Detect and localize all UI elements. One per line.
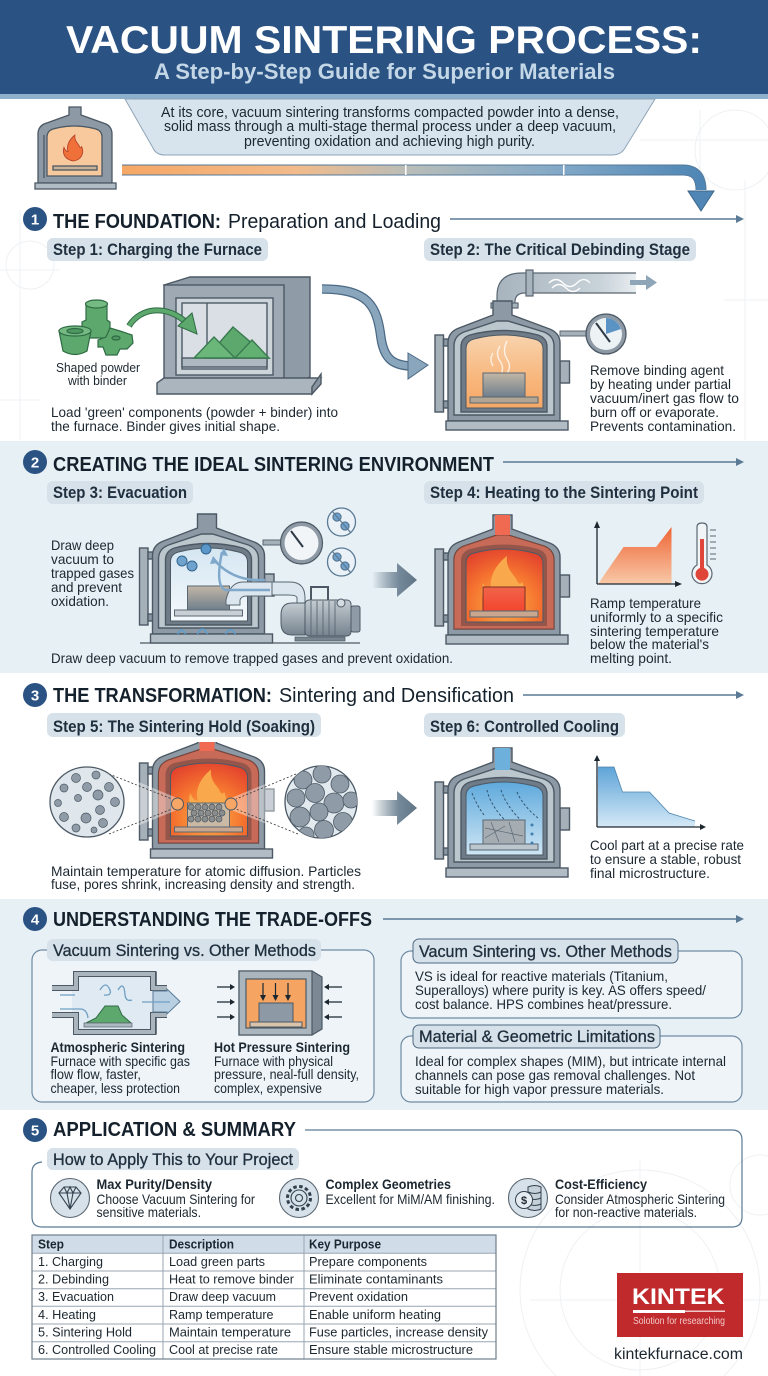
step 6 pill: Step 6: Controlled Cooling bbox=[430, 718, 619, 736]
text: step 3 side note: and prevent bbox=[51, 580, 122, 595]
website url: kintekfurnace.com bbox=[614, 1346, 743, 1363]
step 5 pill bbox=[47, 713, 321, 737]
step 3 pill: Step 3: Evacuation bbox=[53, 484, 187, 502]
arrow: green loading arrow bbox=[129, 310, 197, 334]
box furnace with green load bbox=[157, 277, 321, 394]
intro callout: At its core, vacuum sintering transforms compacted powder into a dense, bbox=[161, 105, 619, 121]
summary table: Fuse particles, increase density bbox=[309, 1324, 488, 1339]
text body bbox=[415, 1054, 726, 1097]
icon: loose particle magnification bbox=[50, 767, 124, 837]
chart: heating ramp bbox=[594, 521, 682, 587]
text: step 5 description: Maintain temperature for atomic diffusion. Particles bbox=[51, 864, 361, 879]
text: complex geometries: Complex Geometries bbox=[326, 1176, 451, 1192]
text: step 3 side note: trapped gases bbox=[51, 566, 134, 581]
panel: material and geometric limitations bbox=[401, 1025, 742, 1102]
text: atmospheric sintering: Atmospheric Sintering bbox=[50, 1039, 185, 1055]
text: step 2 description: by heating under partial bbox=[590, 377, 731, 392]
text: step 2 description: burn off or evaporate. bbox=[590, 405, 719, 420]
panel heading: Material & Geometric Limitations bbox=[419, 1028, 655, 1046]
text: complex geometries bbox=[326, 1176, 495, 1207]
summary table: Heat to remove binder bbox=[169, 1272, 295, 1287]
intro callout: solid mass through a multi-stage thermal process under a deep vacuum, bbox=[164, 119, 616, 135]
summary table: Prevent oxidation bbox=[309, 1289, 408, 1304]
text: complex geometries: Excellent for MiM/AM finishing. bbox=[326, 1192, 495, 1207]
icon: green powder parts bbox=[59, 300, 133, 355]
text body: Ideal for complex shapes (MIM), but intricate internal bbox=[415, 1054, 726, 1069]
section 1 heading bbox=[23, 207, 744, 233]
text: step 2 description bbox=[590, 363, 739, 434]
text: step 5 description: fuse, pores shrink, increasing density and strength. bbox=[51, 877, 355, 892]
icon: gear bbox=[280, 1178, 318, 1218]
section 1 heading: 1 bbox=[31, 212, 39, 228]
text: hot pressure sintering: Furnace with physical bbox=[214, 1054, 333, 1069]
section 4 heading: 4 bbox=[31, 912, 40, 928]
text: step 4 description: uniformly to a specific bbox=[590, 610, 723, 625]
text: hot pressure sintering: Hot Pressure Sintering bbox=[214, 1039, 350, 1055]
illustration: debinding furnace bbox=[435, 301, 570, 430]
icon: thermometer bbox=[692, 523, 716, 584]
icon: vacuum gauge bbox=[263, 522, 322, 564]
illustration: cooling furnace bbox=[435, 748, 570, 877]
text: step 6 description: Cool part at a precise rate bbox=[590, 838, 744, 853]
text: step 4 description: sintering temperature bbox=[590, 624, 719, 639]
caption: shaped powder bbox=[56, 361, 140, 388]
step 2 pill: Step 2: The Critical Debinding Stage bbox=[430, 241, 690, 259]
text: step 4 description bbox=[590, 596, 723, 666]
text: cost efficiency: Cost-Efficiency bbox=[555, 1176, 647, 1192]
icon: hot press furnace bbox=[217, 971, 342, 1035]
caption: shaped powder: with binder bbox=[67, 374, 127, 388]
text: atmospheric sintering: cheaper, less protection bbox=[50, 1081, 180, 1096]
panel heading: Vacum Sintering vs. Other Methods bbox=[419, 943, 672, 961]
text body: Superalloys) where purity is key. AS offers speed/ bbox=[415, 983, 706, 998]
section 1 heading: Preparation and Loading bbox=[228, 210, 441, 233]
text: step 4 description: below the material's bbox=[590, 637, 709, 652]
text: step 2 description: vacuum/inert gas flow to bbox=[590, 391, 739, 406]
icon: exhaust pipe bbox=[491, 270, 657, 308]
text: atmospheric sintering bbox=[50, 1039, 190, 1096]
text: step 3 side note: oxidation. bbox=[51, 594, 109, 609]
arrow: step 3 to step 4 bbox=[372, 563, 417, 597]
text body: channels can pose gas removal challenges. Not bbox=[415, 1068, 695, 1083]
section 3 heading: THE TRANSFORMATION: bbox=[53, 684, 272, 707]
text: hot pressure sintering: complex, expensive bbox=[214, 1081, 322, 1096]
icon: no gas molecules bbox=[328, 508, 356, 576]
panel heading: How to Apply This to Your Project bbox=[53, 1151, 293, 1169]
text: step 1 description bbox=[51, 405, 338, 434]
text: step 2 description: Remove binding agent bbox=[590, 363, 724, 378]
text: step 6 description: final microstructure. bbox=[590, 866, 710, 881]
arrow: step 1 to step 2 bbox=[322, 289, 428, 379]
summary table: 5. Sintering Hold bbox=[38, 1324, 132, 1339]
panel: section 2 background bbox=[0, 441, 768, 673]
icon: diamond bbox=[50, 1178, 90, 1218]
section 5 heading: 5 bbox=[31, 1122, 39, 1140]
section 4 heading bbox=[23, 907, 744, 931]
step 1 pill: Step 1: Charging the Furnace bbox=[53, 241, 262, 259]
logo: KINTEK: Solotion for researching bbox=[633, 1315, 725, 1327]
text: atmospheric sintering: Furnace with specific gas bbox=[50, 1054, 190, 1069]
text body: suitable for high vapor pressure materials. bbox=[415, 1082, 664, 1097]
summary table: 3. Evacuation bbox=[38, 1289, 114, 1304]
summary table: Load green parts bbox=[169, 1254, 265, 1269]
text: step 6 description bbox=[590, 838, 744, 881]
panel: section 4 background bbox=[0, 899, 768, 1110]
step 4 pill: Step 4: Heating to the Sintering Point bbox=[430, 484, 698, 502]
text body: VS is ideal for reactive materials (Titanium, bbox=[415, 969, 668, 984]
summary table: Ramp temperature bbox=[169, 1307, 274, 1322]
section 3 heading: Sintering and Densification bbox=[279, 684, 514, 707]
text: hot pressure sintering bbox=[214, 1039, 359, 1096]
summary table: Ensure stable microstructure bbox=[309, 1342, 473, 1357]
summary table: Key Purpose bbox=[309, 1236, 381, 1251]
summary table: 6. Controlled Cooling bbox=[38, 1342, 156, 1357]
icon: coins bbox=[508, 1178, 548, 1218]
text: cost efficiency: for non-reactive materials. bbox=[555, 1205, 697, 1220]
text: step 1 description: the furnace. Binder gives initial shape. bbox=[51, 419, 280, 434]
icon: atmospheric furnace bbox=[52, 971, 180, 1035]
text: step 5 description bbox=[51, 864, 361, 892]
summary table: Cool at precise rate bbox=[169, 1342, 278, 1357]
step 5 pill: Step 5: The Sintering Hold (Soaking) bbox=[53, 718, 315, 736]
section 1 heading: THE FOUNDATION: bbox=[53, 210, 221, 233]
summary table: 4. Heating bbox=[38, 1307, 96, 1322]
text: max purity: Max Purity/Density bbox=[96, 1176, 212, 1192]
summary table bbox=[32, 1235, 496, 1359]
icon: small furnace bbox=[35, 107, 116, 189]
section 4 heading: UNDERSTANDING THE TRADE-OFFS bbox=[53, 908, 372, 931]
chart: cooling curve bbox=[594, 755, 706, 830]
text: step 1 description: Load 'green' components (powder + binder) into bbox=[51, 405, 338, 420]
section 2 heading bbox=[23, 450, 744, 476]
summary table: Prepare components bbox=[309, 1254, 427, 1269]
text: step 6 description: to ensure a stable, robust bbox=[590, 852, 741, 867]
title: VACUUM SINTERING PROCESS: bbox=[66, 19, 702, 62]
section 5 heading: APPLICATION & SUMMARY bbox=[53, 1118, 296, 1141]
step 6 pill bbox=[424, 713, 625, 737]
subtitle: A Step-by-Step Guide for Superior Materials bbox=[154, 59, 615, 84]
text: step 3 side note: vacuum to bbox=[51, 552, 114, 567]
section 3 heading: 3 bbox=[31, 688, 39, 704]
illustration: heating furnace bbox=[435, 515, 570, 644]
text: cost efficiency bbox=[555, 1176, 725, 1220]
icon: fused particle magnification bbox=[285, 765, 359, 843]
text: max purity: Choose Vacuum Sintering for bbox=[96, 1192, 255, 1207]
logo: KINTEK: KINTEK bbox=[632, 1284, 725, 1309]
text: step 4 description: Ramp temperature bbox=[590, 596, 701, 611]
panel: how to apply bbox=[32, 1130, 742, 1227]
section 2 heading: CREATING THE IDEAL SINTERING ENVIRONMENT bbox=[53, 453, 494, 476]
icon: coins: $ bbox=[521, 1195, 527, 1207]
text: step 3 description: Draw deep vacuum to remove trapped gases and prevent oxidation. bbox=[51, 651, 453, 666]
summary table: 1. Charging bbox=[38, 1254, 103, 1269]
text: step 4 description: melting point. bbox=[590, 651, 672, 666]
text: step 3 side note bbox=[51, 538, 134, 609]
intro callout: preventing oxidation and achieving high purity. bbox=[244, 134, 535, 150]
text: max purity: sensitive materials. bbox=[96, 1205, 201, 1220]
text: step 2 description: Prevents contamination. bbox=[590, 419, 736, 434]
header banner bbox=[0, 0, 768, 99]
panel: vacum sintering summary bbox=[401, 939, 742, 1018]
text: step 3 side note: Draw deep bbox=[51, 538, 114, 553]
summary table: Maintain temperature bbox=[169, 1324, 291, 1339]
text body bbox=[415, 969, 706, 1012]
illustration: soaking furnace bbox=[109, 726, 298, 858]
section 3 heading bbox=[23, 683, 744, 707]
panel heading: Vacuum Sintering vs. Other Methods bbox=[53, 942, 316, 960]
text: cost efficiency: Consider Atmospheric Sintering bbox=[555, 1192, 725, 1207]
logo: KINTEK bbox=[617, 1273, 743, 1337]
section 2 heading: 2 bbox=[31, 454, 39, 472]
summary table: Draw deep vacuum bbox=[169, 1289, 276, 1304]
summary table: Enable uniform heating bbox=[309, 1307, 441, 1322]
summary table: 2. Debinding bbox=[38, 1272, 109, 1287]
summary table: Eliminate contaminants bbox=[309, 1272, 443, 1287]
text: max purity bbox=[96, 1176, 255, 1220]
text: atmospheric sintering: flow flow, faster, bbox=[50, 1067, 141, 1082]
summary table: Step bbox=[38, 1236, 64, 1251]
icon: pressure gauge bbox=[560, 314, 626, 354]
progress arrow bbox=[122, 165, 714, 211]
illustration: evacuation furnace and pump bbox=[140, 514, 360, 643]
arrow: step 5 to step 6 bbox=[372, 791, 417, 825]
intro callout bbox=[125, 99, 655, 155]
panel: vacuum sintering vs other methods bbox=[32, 939, 374, 1102]
text: hot pressure sintering: pressure, neal-full density, bbox=[214, 1067, 359, 1082]
summary table: Description bbox=[169, 1236, 234, 1251]
text body: cost balance. HPS combines heat/pressure. bbox=[415, 997, 672, 1012]
caption: shaped powder: Shaped powder bbox=[56, 361, 140, 375]
